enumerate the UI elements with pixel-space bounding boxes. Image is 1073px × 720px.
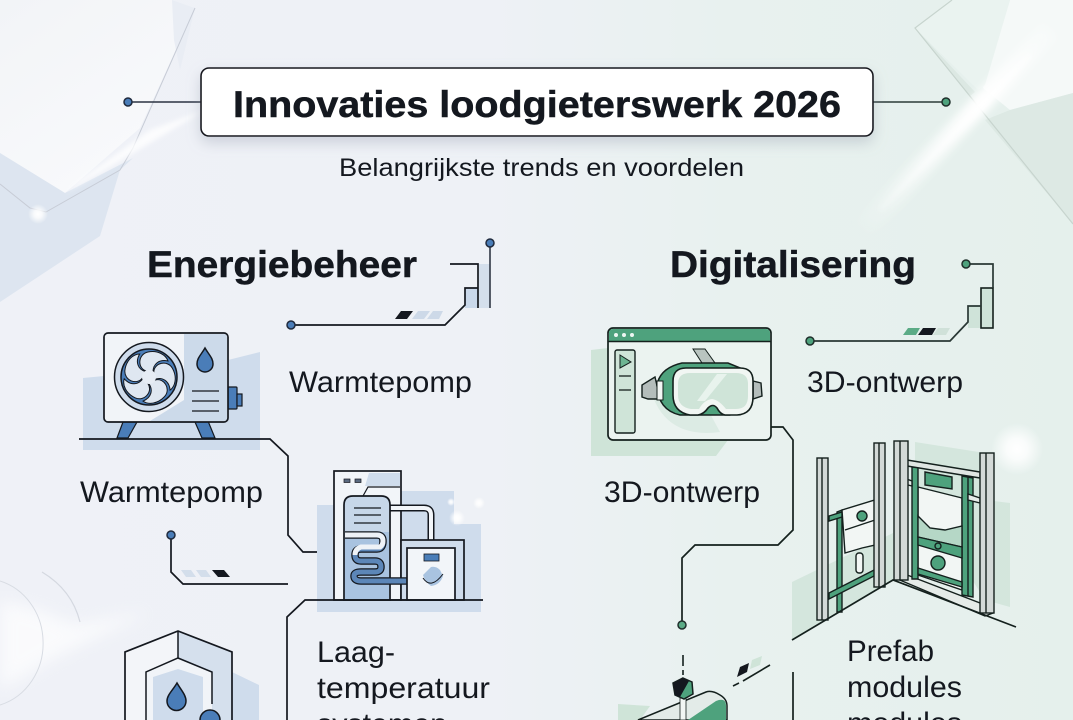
right frame bbox=[895, 573, 993, 616]
glints bbox=[449, 510, 465, 526]
label: Laag-temperatuur systemen bbox=[317, 636, 490, 720]
back unit bbox=[401, 540, 464, 600]
heading: Energiebeheer: Energiebeheer bbox=[147, 244, 417, 285]
circuit decoration: lower left bbox=[167, 531, 288, 584]
title connector left bbox=[124, 98, 201, 106]
icon: low temperature system bbox=[317, 471, 485, 612]
connector: heat pump to low temperature system bbox=[79, 439, 318, 552]
connector: ground line to systems text bbox=[287, 600, 483, 720]
connector: VR window to lower element bbox=[678, 427, 793, 629]
right posts bbox=[894, 441, 908, 580]
water drop bbox=[197, 348, 213, 372]
circuit decoration: Digitalisering bbox=[806, 260, 993, 345]
icon: lower digital device bbox=[618, 655, 727, 720]
label: Prefab modules: modules bbox=[847, 671, 962, 704]
icon: shield water protection bbox=[125, 631, 259, 720]
floor lines bbox=[792, 580, 1016, 640]
vent lines bbox=[192, 391, 219, 411]
fan bbox=[114, 342, 184, 412]
heading: Digitalisering: Digitalisering bbox=[670, 244, 916, 285]
coil bbox=[345, 535, 407, 581]
label: Laag-temperatuur systemen: Laag- bbox=[317, 636, 395, 669]
left frame bbox=[837, 510, 842, 612]
sidebar bbox=[615, 350, 635, 433]
circuit decoration: Energiebeheer bbox=[287, 239, 494, 329]
title box: Innovaties loodgieterswerk 2026 bbox=[233, 84, 841, 125]
front unit bbox=[407, 548, 455, 600]
label: Prefab modules bbox=[847, 635, 962, 720]
circuit decoration: lower right bbox=[733, 656, 793, 720]
label: Warmtepomp top: Warmtepomp bbox=[289, 366, 472, 399]
goggles bbox=[693, 349, 715, 363]
label: Prefab modules: Prefab bbox=[847, 635, 934, 668]
left posts bbox=[817, 458, 828, 620]
label: Warmtepomp lower: Warmtepomp bbox=[80, 476, 263, 509]
icon: prefab modules bbox=[792, 441, 1016, 640]
tank bbox=[344, 496, 390, 600]
label: 3D-ontwerp lower: 3D-ontwerp bbox=[604, 476, 760, 509]
pipe bbox=[390, 508, 431, 541]
label: 3D-ontwerp top: 3D-ontwerp bbox=[807, 366, 963, 399]
label: Laag-temperatuur systemen: temperatuur bbox=[317, 672, 490, 705]
title connector right bbox=[873, 98, 950, 106]
icon: heat pump bbox=[83, 333, 260, 450]
subtitle: Belangrijkste trends en voordelen bbox=[339, 154, 744, 182]
icon: VR design window bbox=[591, 328, 771, 456]
title box bbox=[201, 68, 873, 136]
